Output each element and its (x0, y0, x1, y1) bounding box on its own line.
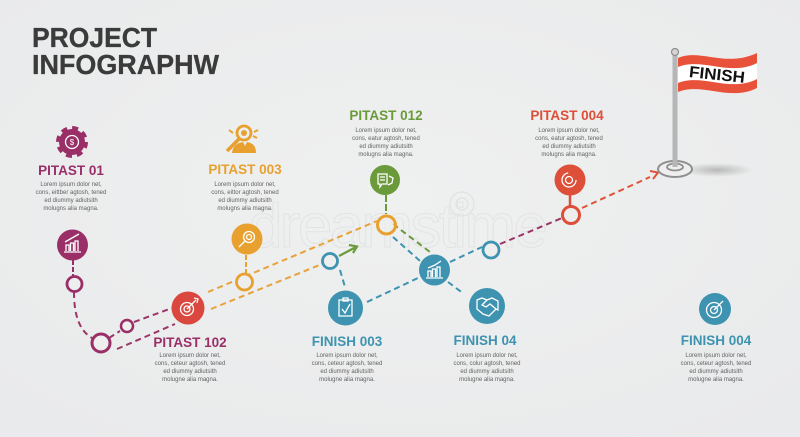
text: Finish 004: molugne alia magna. (688, 377, 744, 383)
text: Pitast 012: Lorem ipsum dolor net, (355, 128, 417, 134)
text: Finish 004: cons, ceteur agtosh, tened (681, 361, 751, 367)
text: Pitast 102: ed diummy adiutsith (163, 369, 217, 375)
node: handshake (469, 288, 505, 324)
timeline dashed paths (74, 177, 650, 349)
text: Finish 003 (312, 334, 383, 383)
ring: blue left (322, 254, 338, 268)
text: Pitast 01: molugns alia magna. (43, 206, 99, 212)
ring: orange center (378, 216, 396, 234)
text: Pitast 012: PITAST 012 (349, 108, 423, 123)
text: Pitast 012: cons, eatur agtosh, tened (352, 136, 420, 142)
node: blue target (699, 293, 731, 325)
text: Pitast 01: Lorem ipsum dolor net, (40, 182, 102, 188)
text: Pitast 102: Lorem ipsum dolor net, (159, 353, 221, 359)
text: Pitast 004: molugns alia magna. (541, 152, 597, 158)
text: Pitast 003: ed diummy adiutsith (218, 198, 272, 204)
ring: orange (236, 274, 252, 290)
text: Pitast 004: cons, eatur agtosh, tened (535, 136, 603, 142)
node: orange icon (232, 224, 262, 273)
node: purple chart (57, 230, 88, 276)
ring: purple (67, 276, 82, 292)
text: Pitast 003: Lorem ipsum dolor net, (214, 182, 276, 188)
text: Finish 003: ed diummy adiutsith (320, 369, 374, 375)
text: Pitast 012 (349, 108, 423, 158)
text: Pitast 102: molugne alia magna. (162, 377, 218, 383)
text: Finish 04: ed diummy adiutsith (460, 369, 514, 375)
text: Finish 004: Lorem ipsum dolor net, (685, 353, 747, 359)
text: Finish 04: molugne alia magna. (459, 377, 515, 383)
finish flag: FINISH (688, 64, 746, 87)
text: Pitast 012: molugns alia magna. (358, 152, 414, 158)
text: Finish 004: FINISH 004 (681, 333, 752, 348)
text: Pitast 003: molugns alia magna. (217, 206, 273, 212)
ring: red (562, 206, 580, 224)
arrow: green (339, 245, 357, 256)
text: Finish 003: cons, ceteur agtosh, tened (312, 361, 382, 367)
title: PROJECT (32, 22, 157, 53)
finish flag (658, 48, 757, 177)
text: Finish 04: Lorem ipsum dolor net, (456, 353, 518, 359)
text: Finish 003: Lorem ipsum dolor net, (316, 353, 378, 359)
text: Pitast 004: Lorem ipsum dolor net, (538, 128, 600, 134)
node: red spiral icon (554, 164, 586, 207)
arrow: to finish (650, 171, 658, 179)
text: Finish 004: ed diummy adiutsith (689, 369, 743, 375)
text: Finish 003: FINISH 003 (312, 334, 383, 349)
text: Pitast 102 (153, 335, 227, 383)
text: Pitast 003 (208, 162, 282, 212)
ring: purple small (121, 320, 133, 332)
text: Finish 04 (453, 333, 521, 383)
text: Pitast 01: ed diummy adiutsith (44, 198, 98, 204)
icon: person with magnifier (227, 126, 258, 153)
node: red target (172, 292, 204, 324)
title (32, 22, 220, 80)
text: Finish 04: FINISH 04 (453, 333, 517, 348)
watermark: dreamstime (248, 192, 548, 261)
icon: gear with dollar: $ (70, 138, 75, 147)
ring: purple large (92, 334, 110, 352)
text: Pitast 01: cons, eittber agtosh, tened (36, 190, 106, 196)
node: clipboard (328, 290, 363, 326)
text: Pitast 01 (36, 163, 106, 212)
text: Pitast 003: PITAST 003 (208, 162, 282, 177)
icon: gear with dollar (58, 128, 86, 156)
text: Finish 04: cons, colur agtosh, tened (453, 361, 521, 367)
title: INFOGRAPHW (32, 49, 220, 80)
text: Finish 004 (681, 333, 752, 383)
text: Finish 003: molugne alia magna. (319, 377, 375, 383)
text: Pitast 102: cons, ceteur agtosh, tened (155, 361, 225, 367)
node: green icon (370, 165, 400, 214)
text: Pitast 102: PITAST 102 (153, 335, 227, 350)
text: Pitast 003: cons, eittor agtosh, tened (211, 190, 279, 196)
text: Pitast 012: ed diummy adiutsith (359, 144, 413, 150)
text: Pitast 01: PITAST 01 (38, 163, 104, 178)
text: Pitast 004: PITAST 004 (530, 108, 604, 123)
ring: blue right (483, 242, 499, 258)
node: blue chart (419, 254, 450, 286)
text: Pitast 004: ed diummy adiutsith (542, 144, 596, 150)
text: Pitast 004 (530, 108, 604, 158)
